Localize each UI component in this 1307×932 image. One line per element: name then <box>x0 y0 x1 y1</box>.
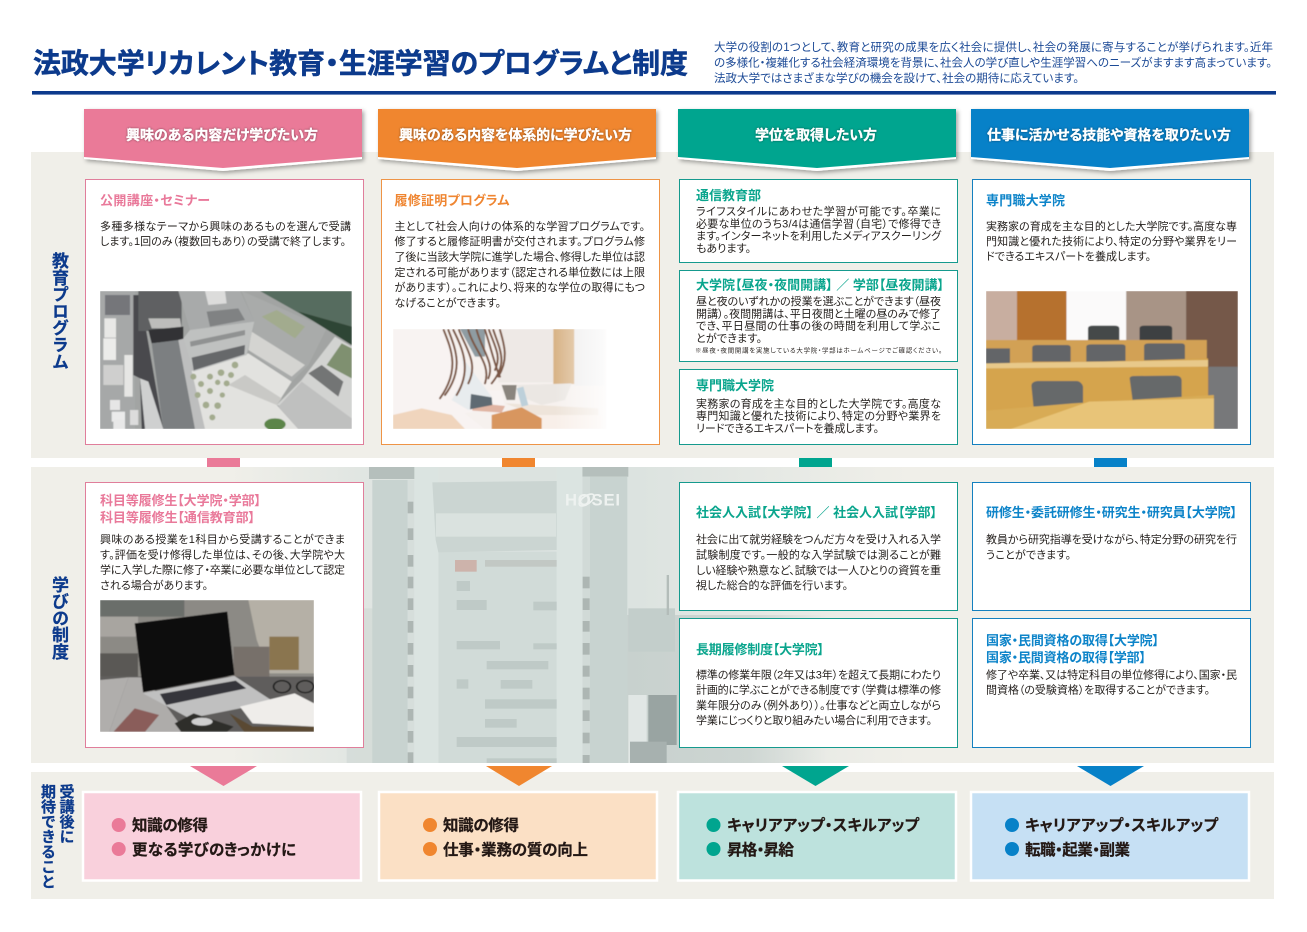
bullet item: 昇格・昇給 <box>727 840 794 859</box>
body text: 修了や卒業、又は特定科目の単位修得により、国家・民 <box>986 667 1237 681</box>
header arrow: blue: 仕事に活かせる技能や資格を取りたい方 <box>987 127 1231 143</box>
body text: 必要な単位のうち3/4は通信学習（自宅）で修得でき <box>696 216 941 230</box>
body text: される場合があります。 <box>100 578 208 592</box>
title: 法政大学リカレント教育・生涯学習のプログラムと制度 <box>33 47 688 79</box>
panel: correspondence education <box>680 180 958 262</box>
body text: 学に入学した際に修了・卒業に必要な単位として認定 <box>100 563 345 577</box>
intro text: 大学の役割の1つとして、教育と研究の成果を広く社会に提供し、社会の発展に寄与することが挙げられます。近年 <box>714 40 1273 54</box>
bullet item: 更なる学びのきっかけに <box>132 840 296 859</box>
header arrow: green: 学位を取得したい方 <box>755 127 877 143</box>
body text <box>986 667 1237 697</box>
building sign: HOSEI <box>565 490 620 509</box>
body text: 開講）。夜間開講は、平日夜間と土曜の昼のみで修了 <box>696 306 941 320</box>
heading: 大学院【昼夜・夜間開講】 ／ 学部【昼夜開講】 <box>696 278 944 292</box>
footnote: ※昼夜・夜間開講を実施している大学院・学部はホームページでご確認ください。 <box>695 346 942 354</box>
panel: qualifications <box>972 618 1250 748</box>
panel: outcome blue <box>971 792 1249 880</box>
arrow: orange triangle <box>486 766 552 786</box>
body text: もあります。 <box>696 242 751 255</box>
panel: certificate program <box>382 180 660 444</box>
panel: outcome green <box>678 792 956 880</box>
body text: うことができます。 <box>986 547 1071 561</box>
panel: day and night courses <box>680 270 958 362</box>
body text: リードできるエキスパートを養成します。 <box>696 422 879 435</box>
row label: after the course: 期待できること <box>39 784 56 889</box>
body text <box>696 204 942 255</box>
body text: 業年限分のみ（例外あり））。仕事などと両立しながら <box>696 698 941 712</box>
body text: でき、平日昼間の仕事の後の時間を利用して学ぶこ <box>696 319 941 333</box>
bullet item <box>706 840 794 859</box>
panel: long-term enrollment <box>680 618 958 748</box>
heading: 公開講座・セミナー <box>100 193 210 208</box>
body text <box>100 219 351 248</box>
heading: 国家・民間資格の取得【大学院】 <box>986 633 1159 648</box>
bullet item: 転職・起業・副業 <box>1025 841 1130 859</box>
body text: 教員から研究指導を受けながら、特定分野の研究を行 <box>986 532 1237 546</box>
body text: します。1回のみ（複数回もあり）の受講で終了します。 <box>100 234 346 248</box>
body text: 修了すると履修証明書が交付されます。プログラム修 <box>394 234 645 248</box>
body text: す。評価を受け修得した単位は、その後、大学院や大 <box>100 547 345 561</box>
bullet item: 仕事・業務の質の向上 <box>443 840 588 859</box>
body text: 専門知識と優れた技術により、特定の分野や業界を <box>696 409 941 423</box>
body text: なげることができます。 <box>394 296 501 310</box>
heading: 専門職大学院 <box>696 378 774 393</box>
bullet item: キャリアアップ・スキルアップ <box>727 816 920 834</box>
body text <box>986 219 1237 263</box>
body text: 多種多様なテーマから興味のあるものを選んで受講 <box>100 219 351 233</box>
heading: 科目等履修生【通信教育部】 <box>100 510 255 525</box>
body text: 試験制度です。一般的な入学試験では測ることが難 <box>696 548 941 562</box>
connector bars between rows <box>207 458 1127 467</box>
body text: 標準の修業年限（2年又は3年）を超えて長期にわたり <box>696 667 941 681</box>
body text: 学業にじっくりと取り組みたい場合に利用できます。 <box>696 713 932 727</box>
heading: 国家・民間資格の取得【学部】 <box>986 650 1146 665</box>
header arrow: pink <box>84 109 362 171</box>
body text: 門知識と優れた技術により、特定の分野や業界をリー <box>986 234 1237 248</box>
band: expected outcomes background <box>31 772 1274 899</box>
row label: education programs: 教育プログラム <box>49 252 68 370</box>
photo: lecture room <box>986 291 1238 429</box>
panel: credited auditors <box>86 482 364 748</box>
body text: 社会に出て就労経験をつんだ方々を受け入れる入学 <box>696 532 941 546</box>
body text: 計画的に学ぶことができる制度です（学費は標準の修 <box>696 683 941 697</box>
body text <box>394 219 645 310</box>
panel: professional graduate school (skills) <box>972 180 1250 444</box>
header arrow: blue <box>971 109 1249 171</box>
band: education programs background <box>31 152 1274 458</box>
photo: aerial view of campus <box>100 291 352 430</box>
body text: ます。インターネットを利用したメディアスクーリング <box>696 229 942 243</box>
bullet item: 知識の修得 <box>443 816 519 834</box>
arrow: blue triangle <box>1077 766 1144 786</box>
heading <box>986 633 1159 665</box>
row label: after the course <box>39 783 74 889</box>
bullet item: 知識の修得 <box>132 816 208 834</box>
body text <box>696 396 941 435</box>
panel: outcome orange <box>379 792 657 880</box>
body text: 視した総合的な評価を行います。 <box>696 578 848 592</box>
bullet item: キャリアアップ・スキルアップ <box>1025 816 1219 834</box>
body text: 了後に当該大学院に進学した場合、修得した単位は認 <box>394 250 645 264</box>
body text <box>696 532 941 592</box>
row label: after the course: 受講後に <box>58 783 74 844</box>
heading: 長期履修制度【大学院】 <box>696 642 824 657</box>
arrow: green triangle <box>782 766 849 786</box>
body text <box>696 667 941 727</box>
panel: working adult entrance exam <box>680 482 958 610</box>
header arrow: orange: 興味のある内容を体系的に学びたい方 <box>399 127 632 143</box>
body text: しい経験や熟意など、試験では一人ひとりの資質を重 <box>696 563 941 577</box>
panel: public lectures <box>86 180 364 444</box>
arrow: pink triangle <box>190 766 257 786</box>
header arrow: orange <box>378 109 656 171</box>
band: learning systems background with building photo <box>31 467 1274 765</box>
body text <box>986 532 1237 561</box>
body text: ライフスタイルにあわせた学習が可能です。卒業に <box>696 204 941 218</box>
heading: 研修生・委託研修生・研究生・研究員【大学院】 <box>986 505 1237 520</box>
body text: 実務家の育成を主な目的とした大学院です。高度な <box>696 396 941 410</box>
intro text: の多様化・複雑化する社会経済環境を背景に、社会人の学び直しや生涯学習へのニーズがますます高まっています。 <box>714 56 1272 70</box>
body text: 主として社会人向けの体系的な学習プログラムです。 <box>394 219 645 233</box>
body text: 昼と夜のいずれかの授業を選ぶことができます（昼夜 <box>696 294 941 308</box>
heading: 科目等履修生【大学院・学部】 <box>100 493 261 508</box>
panel: professional graduate school (degree) <box>680 370 958 444</box>
body text: 興味のある授業を1科目から受講することができま <box>100 532 345 546</box>
intro text: 法政大学ではさまざまな学びの機会を設けて、社会の期待に応えています。 <box>714 71 1079 85</box>
heading <box>100 493 261 525</box>
body text: ドできるエキスパートを養成します。 <box>986 250 1151 263</box>
panel: research students <box>972 482 1250 610</box>
body text: とができます。 <box>696 331 762 345</box>
body text: 間資格（の受験資格）を取得することができます。 <box>986 683 1210 697</box>
photo: laptop on desk <box>100 600 314 732</box>
body text: があります）。これにより、将来的な学位の取得にもつ <box>394 280 645 294</box>
heading: 履修証明プログラム <box>394 193 510 208</box>
intro text <box>714 40 1273 85</box>
panel: outcome pink <box>83 792 361 880</box>
heading: 社会人入試【大学院】 ／ 社会人入試【学部】 <box>696 505 937 520</box>
body text <box>100 532 345 592</box>
heading: 専門職大学院 <box>986 193 1065 208</box>
row label: learning systems: 学びの制度 <box>49 575 68 661</box>
photo: woman writing <box>393 329 619 429</box>
header arrow: green <box>678 109 956 171</box>
header arrow: pink: 興味のある内容だけ学びたい方 <box>126 127 318 143</box>
body text: 定される可能があります（認定される単位数には上限 <box>394 265 645 279</box>
body text <box>696 294 941 345</box>
heading: 通信教育部 <box>696 188 761 203</box>
body text: 実務家の育成を主な目的とした大学院です。高度な専 <box>986 219 1237 233</box>
